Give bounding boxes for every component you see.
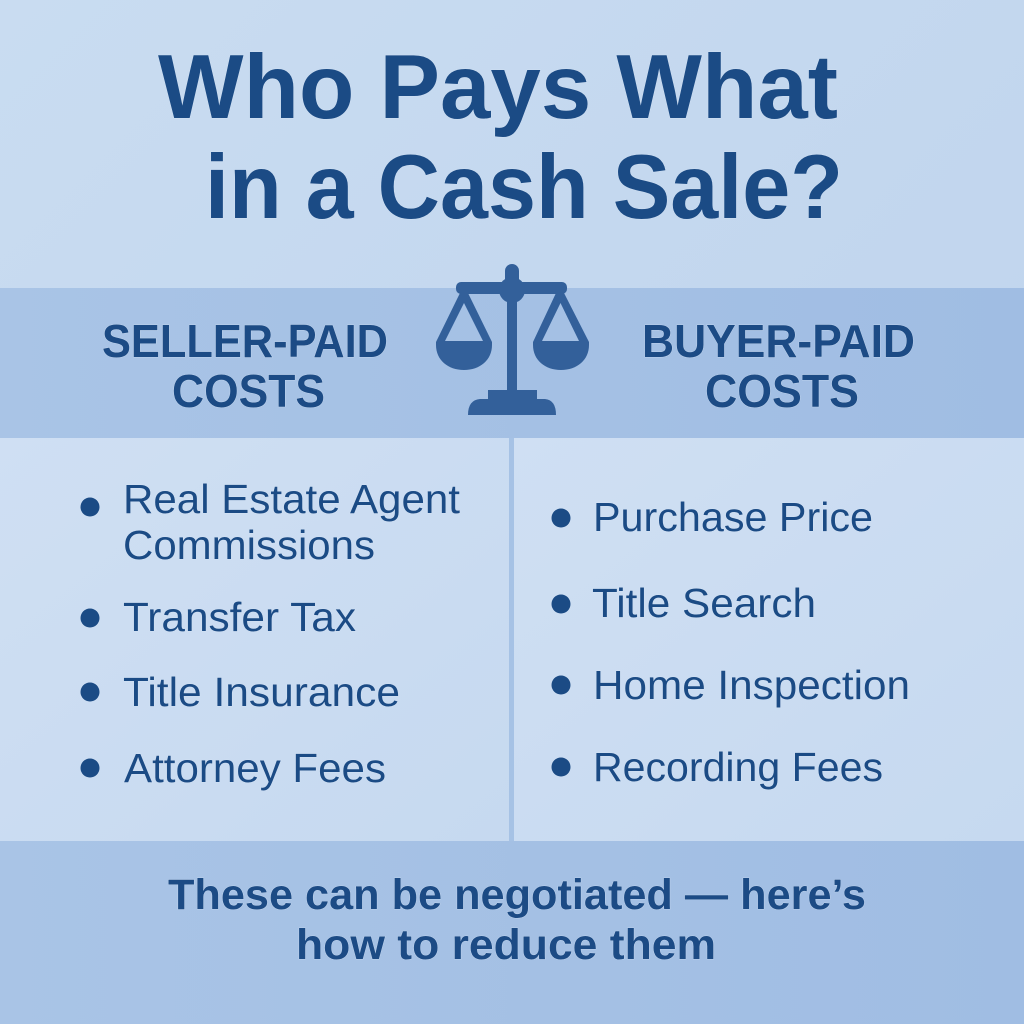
title: in a Cash Sale? bbox=[205, 137, 843, 238]
heading: buyer-paid costs bbox=[642, 315, 915, 417]
heading: buyer-paid costs: BUYER-PAID bbox=[642, 315, 915, 367]
heading: seller-paid costs bbox=[102, 315, 388, 417]
heading: buyer-paid costs: COSTS bbox=[705, 365, 859, 417]
seller list items bbox=[80, 476, 461, 791]
footer text: how to reduce them bbox=[296, 921, 716, 969]
icon: balance scale bbox=[436, 264, 589, 415]
header band bbox=[0, 288, 1024, 438]
footer text bbox=[168, 871, 866, 969]
seller list items: Transfer Tax bbox=[123, 594, 357, 640]
buyer list items: Recording Fees bbox=[593, 744, 883, 790]
buyer list items: Purchase Price bbox=[593, 494, 873, 540]
seller list items: Commissions bbox=[123, 522, 375, 568]
buyer list items: Home Inspection bbox=[593, 662, 910, 708]
seller list items: Title Insurance bbox=[123, 669, 400, 715]
buyer list items bbox=[552, 494, 910, 790]
panel: seller-paid list bbox=[0, 438, 514, 841]
buyer list items: Title Search bbox=[592, 580, 816, 626]
heading: seller-paid costs: COSTS bbox=[172, 365, 325, 417]
seller list items: Real Estate Agent bbox=[123, 476, 461, 522]
footer text: These can be negotiated — here’s bbox=[168, 871, 866, 919]
heading: seller-paid costs: SELLER-PAID bbox=[102, 315, 388, 367]
seller list items: Attorney Fees bbox=[124, 745, 386, 791]
title bbox=[158, 37, 843, 238]
panel: buyer-paid list bbox=[514, 438, 1024, 841]
title: Who Pays What bbox=[158, 37, 838, 138]
panel divider bbox=[509, 438, 514, 841]
footer band bbox=[0, 841, 1024, 1024]
